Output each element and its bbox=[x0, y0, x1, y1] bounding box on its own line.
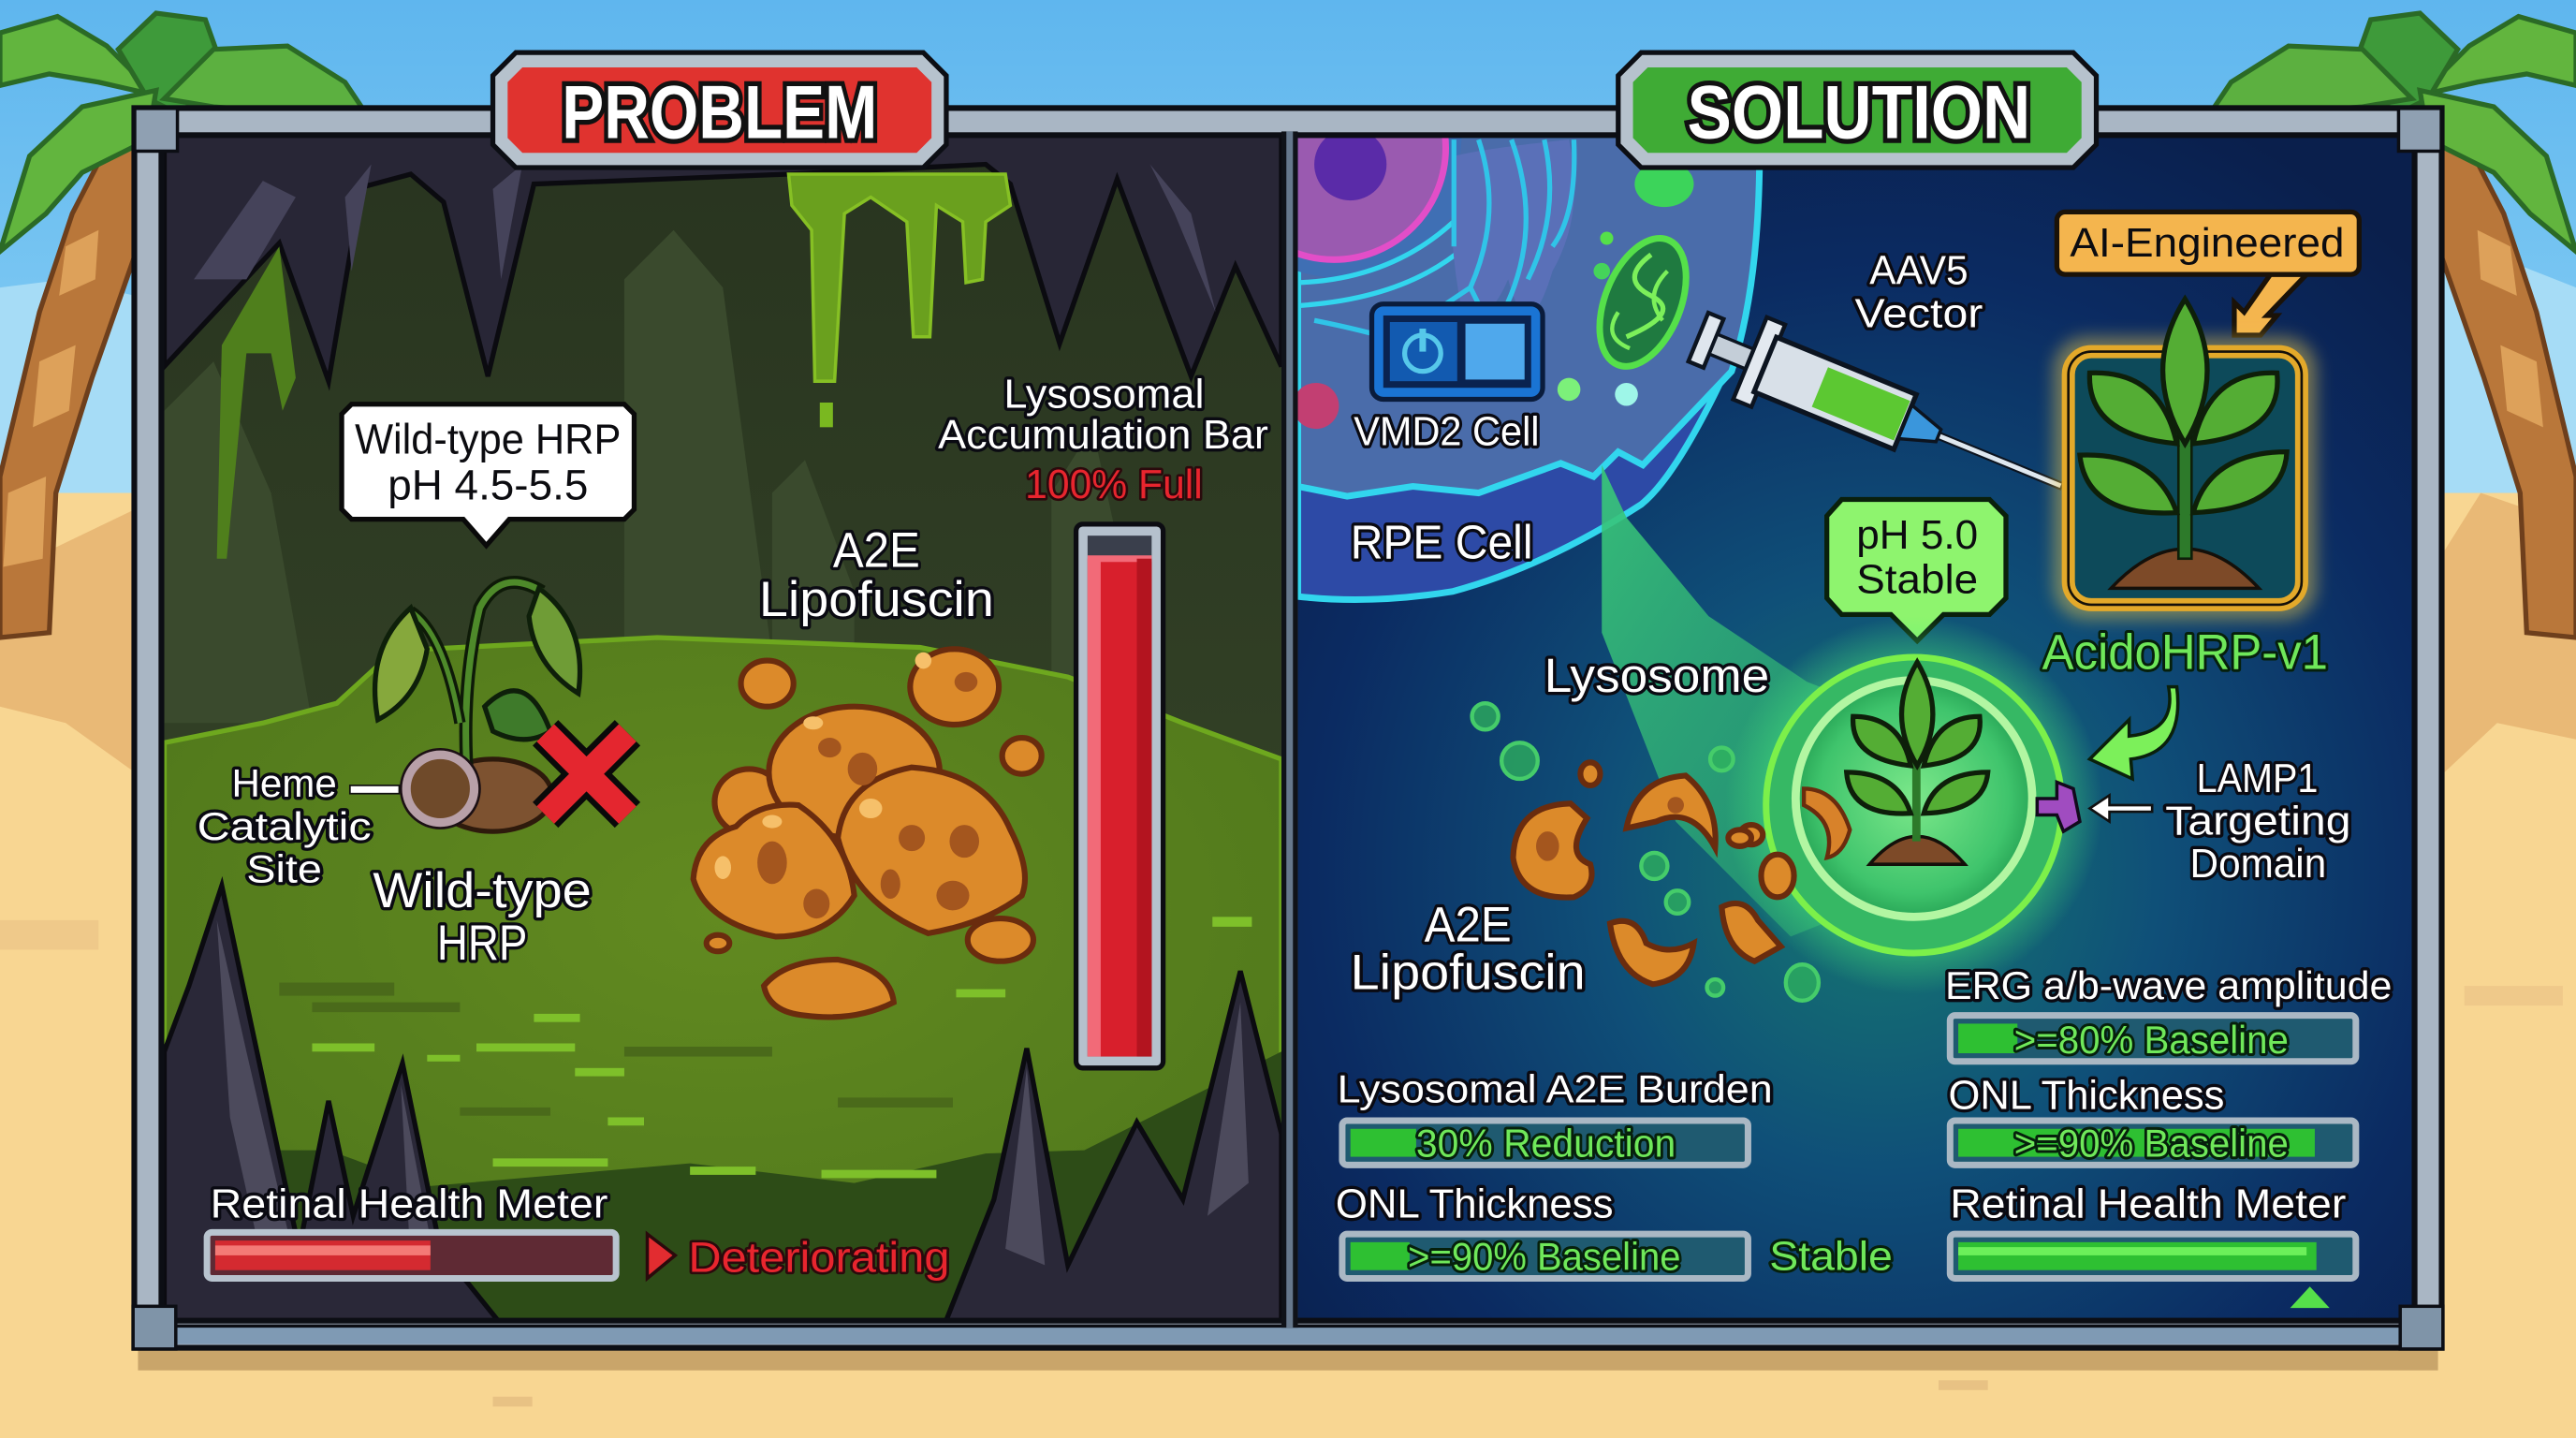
ground dark patches bbox=[279, 983, 953, 1116]
label: AAV5 vector: AAV5 bbox=[1869, 248, 1969, 294]
metric: ONL thickness left: Stable bbox=[1769, 1234, 1893, 1280]
degraded A2E fragments bbox=[1513, 762, 1850, 984]
label: LAMP1 targeting domain: Targeting bbox=[2165, 799, 2351, 844]
palm tree right bbox=[2211, 13, 2576, 638]
ground dark lower edge bbox=[165, 1051, 1281, 1325]
stalagmite highlight bbox=[217, 920, 435, 1265]
lysosomal accumulation label: Lysosomal bbox=[1003, 371, 1204, 417]
navy background bbox=[1298, 135, 2419, 1325]
heme catalytic site: Site bbox=[246, 846, 322, 890]
stalagmites left bbox=[165, 886, 501, 1325]
retinal health meter: restored bbox=[1950, 1181, 2356, 1308]
AI-engineered tag bbox=[2056, 212, 2359, 335]
cave back wall bbox=[165, 135, 1281, 1325]
red X mark bbox=[546, 733, 627, 815]
speech bubble: wild-type HRP: pH 4.5-5.5 bbox=[388, 462, 588, 509]
panel: problem bbox=[165, 135, 1281, 1325]
metric: ONL thickness left: >=90% Baseline bbox=[1408, 1235, 1680, 1279]
A2E lipofuscin pile bbox=[694, 649, 1042, 1017]
heme catalytic site bbox=[198, 749, 479, 890]
stalagmite highlight right bbox=[1005, 1003, 1249, 1265]
metric: ONL thickness right: >=90% Baseline bbox=[2014, 1122, 2289, 1166]
label: AAV5 vector: Vector bbox=[1855, 290, 1983, 336]
label: A2E lipofuscin: A2E bbox=[1425, 898, 1512, 953]
AI-engineered tag: AI-Engineered bbox=[2070, 220, 2345, 266]
metric: ONL thickness right: ONL Thickness bbox=[1949, 1073, 2224, 1119]
heme catalytic site: Catalytic bbox=[198, 804, 372, 848]
green targeting beam bbox=[1602, 465, 1914, 936]
metric: lysosomal A2E burden: 30% Reduction bbox=[1416, 1122, 1676, 1166]
RPE cell outer zone bbox=[1298, 135, 1755, 599]
heme catalytic site: Heme bbox=[231, 761, 337, 805]
label: AAV5 vector bbox=[1855, 248, 1983, 336]
metric: lysosomal A2E burden: Lysosomal A2E Burden bbox=[1338, 1067, 1773, 1111]
retinal health meter: deteriorating: Retinal Health Meter bbox=[211, 1181, 607, 1227]
banner: problem: PROBLEM bbox=[562, 70, 877, 154]
ground streaks bbox=[312, 917, 1251, 1178]
pH stable bubble: Stable bbox=[1856, 557, 1978, 603]
lysosomal accumulation label: Accumulation Bar bbox=[938, 412, 1268, 458]
banner: problem bbox=[493, 52, 946, 168]
metric: ONL thickness left: ONL Thickness bbox=[1336, 1181, 1614, 1227]
label: VMD2 cell: VMD2 Cell bbox=[1354, 409, 1540, 455]
palm tree left bbox=[0, 13, 365, 638]
speech bubble: wild-type HRP bbox=[342, 404, 634, 546]
panel: solution bbox=[1222, 37, 2419, 1325]
retinal health meter: deteriorating: Deteriorating bbox=[688, 1233, 949, 1281]
wilted plant bbox=[375, 582, 580, 831]
ceiling highlights bbox=[194, 165, 1216, 312]
label: LAMP1 targeting domain: LAMP1 bbox=[2197, 756, 2318, 801]
metric: ONL thickness left bbox=[1336, 1181, 1893, 1280]
label: A2E lipofuscin: Lipofuscin bbox=[759, 572, 994, 627]
VMD2 cell inner zone bbox=[1298, 135, 1760, 496]
label: A2E lipofuscin: Lipofuscin bbox=[1351, 946, 1586, 1001]
LAMP1 anchor bbox=[2037, 782, 2080, 831]
floating bubbles bbox=[1472, 703, 1819, 1001]
mitochondrion bbox=[1583, 226, 1703, 379]
metric: ERG amplitude bbox=[1945, 963, 2392, 1062]
metric: ERG amplitude: ERG a/b-wave amplitude bbox=[1945, 963, 2392, 1007]
metric: ONL thickness right bbox=[1949, 1073, 2356, 1166]
lysosomal accumulation label bbox=[938, 371, 1268, 507]
label: AcidoHRP-v1: AcidoHRP-v1 bbox=[2042, 624, 2328, 680]
VMD2 switch bbox=[1372, 304, 1543, 399]
banner: solution: SOLUTION bbox=[1687, 70, 2030, 154]
lysosomal accumulation bar bbox=[1076, 524, 1164, 1068]
lysosome with plant bbox=[1725, 616, 2103, 994]
label: wild-type HRP: HRP bbox=[437, 916, 527, 971]
engineered plant card bbox=[2054, 299, 2317, 620]
label: A2E lipofuscin bbox=[1351, 898, 1586, 1001]
speech bubble: wild-type HRP: Wild-type HRP bbox=[355, 415, 621, 462]
metric: ERG amplitude: >=80% Baseline bbox=[2014, 1018, 2289, 1062]
nucleus bbox=[1297, 138, 1462, 308]
pH stable bubble: pH 5.0 bbox=[1856, 512, 1978, 558]
stalagmites right bbox=[944, 971, 1281, 1325]
metric: lysosomal A2E burden bbox=[1338, 1067, 1773, 1166]
label: A2E lipofuscin bbox=[759, 523, 994, 627]
pH stable bubble bbox=[1827, 500, 2006, 640]
label: RPE cell: RPE Cell bbox=[1351, 516, 1533, 569]
retinal health meter: restored: Retinal Health Meter bbox=[1950, 1181, 2346, 1227]
drop bbox=[820, 403, 833, 427]
label: wild-type HRP: Wild-type bbox=[373, 863, 592, 918]
label: lysosome: Lysosome bbox=[1544, 649, 1769, 702]
cave wall shading bbox=[165, 230, 1150, 723]
label: A2E lipofuscin: A2E bbox=[833, 523, 920, 579]
vesicles bbox=[1293, 161, 1694, 429]
label: wild-type HRP bbox=[373, 863, 592, 971]
curved green arrow bbox=[2089, 687, 2178, 779]
metal frame bbox=[133, 109, 2443, 1349]
left wall slime bbox=[217, 246, 296, 559]
banner: solution bbox=[1618, 52, 2097, 168]
lysosomal accumulation label: 100% Full bbox=[1025, 462, 1203, 507]
retinal health meter: deteriorating bbox=[207, 1181, 949, 1281]
cave ceiling with stalactites bbox=[165, 135, 1281, 381]
label: LAMP1 targeting domain bbox=[2165, 756, 2351, 887]
slime drips bbox=[788, 174, 1010, 381]
toxic ground bbox=[165, 638, 1281, 1325]
endoplasmic reticulum bbox=[1314, 139, 1574, 353]
white pointer arrow bbox=[2089, 795, 2152, 822]
label: LAMP1 targeting domain: Domain bbox=[2190, 841, 2326, 887]
syringe bbox=[1681, 296, 2078, 527]
